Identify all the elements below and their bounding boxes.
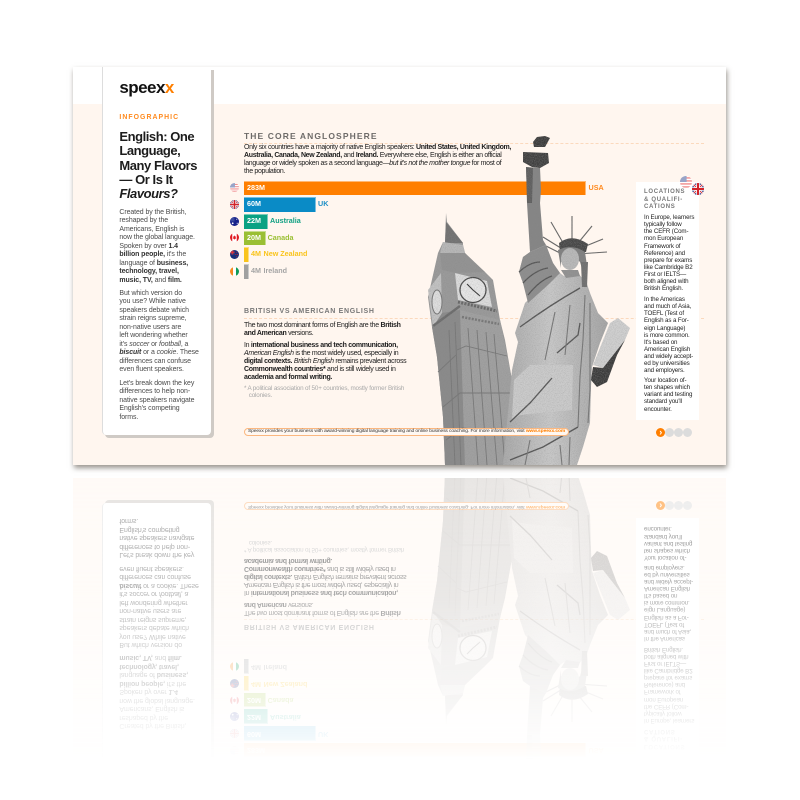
text block: americas: In the Americas xyxy=(644,296,685,303)
title: — Or Is It xyxy=(119,172,173,187)
bar: Canada: 20M xyxy=(247,233,261,242)
mirrored reflection of the infographic: billion people, it's the xyxy=(119,680,186,687)
text block: intro: language of business, xyxy=(119,260,188,266)
text block: which version: you use? While native xyxy=(119,298,186,305)
text block: which version: it's soccer or football, a xyxy=(119,340,188,348)
bar: USA: 283M xyxy=(247,183,265,192)
text block: americas: eign Language) xyxy=(644,325,685,332)
mirrored reflection of the infographic: non-native users are xyxy=(119,608,181,614)
text block: closing xyxy=(119,380,194,420)
heading: the core anglosphere: THE CORE ANGLOSPHERE xyxy=(244,131,378,141)
text block: closing: differences to help non- xyxy=(119,388,190,395)
bar: Canada: Canada xyxy=(268,233,294,242)
mirrored reflection of the infographic: CATIONS xyxy=(644,728,675,734)
mirrored reflection of the infographic: music, TV, and film. xyxy=(119,654,182,662)
text block: europe: Framework of xyxy=(644,243,680,250)
text block: dominant forms: The two most dominant forms of English are the British xyxy=(244,322,401,329)
white header band xyxy=(73,67,726,104)
text block: anglosphere intro: language or widely spoken as a second language—but it's not the mother tongue for most of xyxy=(244,160,501,167)
text block: which version: strain reigns supreme, xyxy=(119,315,186,322)
pagination dots xyxy=(656,427,692,437)
logo: speexx: speexx xyxy=(119,78,174,97)
text block: europe: In Europe, learners xyxy=(644,214,694,221)
mirrored reflection of the infographic: even fluent speakers. xyxy=(119,565,184,572)
text block: dominant forms xyxy=(244,322,401,337)
mirrored reflection of the infographic: reshaped by the xyxy=(119,714,168,721)
text block: which version: But which version do xyxy=(119,290,182,296)
bar: Ireland: 4M xyxy=(251,266,261,275)
text block: closing: English's competing xyxy=(119,405,180,412)
mirrored reflection of the infographic: 4M xyxy=(251,680,261,689)
text block: which version: biscuit or a cookie. These xyxy=(119,349,199,356)
text block: which version: non-native users are xyxy=(119,324,181,330)
title: Many Flavors xyxy=(119,158,197,173)
text block: which version xyxy=(119,290,199,373)
heading: locations & qualifications: & QUALIFI- xyxy=(644,196,683,202)
text block: anglosphere intro xyxy=(244,144,511,175)
text block: americas: is more common. xyxy=(644,332,690,339)
text block: europe: both aligned with xyxy=(644,278,688,285)
mirrored reflection of the infographic xyxy=(73,478,726,746)
text block: americas: It's based on xyxy=(644,339,677,346)
mirrored reflection of the infographic: and widely accept- xyxy=(644,578,693,585)
mirrored reflection of the infographic: Speexx provides your business with award-winning digital language training and online business coaching. For more information, visit www.speexx.com xyxy=(248,504,565,509)
heading: locations & qualifications: LOCATIONS xyxy=(644,189,685,195)
mirrored reflection of the infographic: language of business, xyxy=(119,672,188,678)
text block: closing: Let's break down the key xyxy=(119,380,194,386)
mirrored reflection of the infographic: it's soccer or football, a xyxy=(119,590,188,598)
text block: usage: digital contexts. British English remains prevalent across xyxy=(244,358,406,365)
text block: which version: left wondering whether xyxy=(119,332,188,339)
title: English: One xyxy=(119,129,194,144)
mirrored reflection of the infographic: Ireland xyxy=(264,663,287,672)
bar: Ireland: Ireland xyxy=(264,266,287,275)
mirrored reflection of the infographic: both aligned with xyxy=(644,653,688,660)
bar: Ireland xyxy=(230,264,287,279)
bar: USA xyxy=(230,181,604,195)
mirrored reflection of the infographic: UK xyxy=(318,730,328,739)
text block: your location: encounter. xyxy=(644,406,672,413)
mirrored reflection of the infographic: now the global language. xyxy=(119,697,195,704)
text block: europe: British English. xyxy=(644,285,683,292)
mirrored reflection of the infographic: strain reigns supreme, xyxy=(119,616,186,623)
mirrored reflection of the infographic: 4M xyxy=(251,663,261,672)
mirrored reflection of the infographic: differences to help non- xyxy=(119,543,190,550)
mirrored reflection of the infographic: USA xyxy=(588,746,604,755)
panel: british vs american english xyxy=(244,308,704,399)
text block: which version: differences can confuse xyxy=(119,358,191,364)
mirrored reflection of the infographic: ten shapes which xyxy=(644,547,690,554)
text block: intro: Americans, English is xyxy=(119,226,184,232)
mirrored reflection of the infographic: Australia xyxy=(270,713,301,722)
text block: anglosphere intro: the population. xyxy=(244,168,285,175)
mirrored reflection of the infographic: variant and testing xyxy=(644,540,692,547)
mirrored reflection of the infographic: digital contexts. British English remains prevalent across xyxy=(244,573,406,580)
mirrored reflection of the infographic: you use? While native xyxy=(119,633,186,640)
mirrored reflection of the infographic: Created by the British, xyxy=(119,722,186,730)
text block: your location: Your location of- xyxy=(644,377,686,384)
panel: locations and qualifications xyxy=(636,182,699,420)
mirrored reflection of the infographic: the CEFR (Com- xyxy=(644,703,688,710)
heading: british vs american: BRITISH VS AMERICAN ENGLISH xyxy=(244,308,375,315)
text block: your location xyxy=(644,377,692,413)
text block: intro: now the global language. xyxy=(119,234,195,241)
text block: your location: variant and testing xyxy=(644,391,692,398)
icon: US flag xyxy=(680,176,692,188)
mirrored reflection of the infographic: mon European xyxy=(644,696,683,703)
text block: americas: American English xyxy=(644,346,690,353)
mirrored reflection of the infographic: 60M xyxy=(247,730,261,739)
text block: europe: the CEFR (Com- xyxy=(644,228,688,235)
text block: americas: and employers. xyxy=(644,367,685,374)
mirrored reflection of the infographic: English as a For- xyxy=(644,614,689,621)
text block: americas xyxy=(644,296,693,374)
text block: intro: billion people, it's the xyxy=(119,251,186,258)
text block: intro: Spoken by over 1.4 xyxy=(119,242,178,250)
text block: americas: and widely accept- xyxy=(644,353,693,360)
mirrored reflection of the infographic: native speakers navigate xyxy=(119,534,194,542)
text block: americas: and much of Asia, xyxy=(644,303,691,310)
bar: Australia: 22M xyxy=(247,216,261,225)
illustration: big ben and statue of liberty xyxy=(428,136,630,465)
text block: intro: Created by the British, xyxy=(119,208,186,216)
mirrored reflection of the infographic: technology, travel, xyxy=(119,663,179,670)
title: Language, xyxy=(119,143,180,158)
mirrored reflection of the infographic: Let's break down the key xyxy=(119,552,194,558)
mirrored reflection of the infographic: biscuit or a cookie. These xyxy=(119,582,199,589)
mirrored reflection of the infographic: 283M xyxy=(247,746,265,755)
text block: which version: even fluent speakers. xyxy=(119,366,184,373)
text block: americas: ed by universities xyxy=(644,360,690,367)
mirrored reflection of the infographic: is more common. xyxy=(644,599,690,606)
label: infographic: INFOGRAPHIC xyxy=(119,114,179,121)
heading: locations & qualifications xyxy=(644,188,685,210)
mirrored reflection of the infographic: colonies. xyxy=(249,539,272,546)
mirrored reflection of the infographic: › xyxy=(659,501,662,511)
mirrored reflection of the infographic: American English is the most widely used, especially in xyxy=(244,581,398,588)
panel: sidebar intro xyxy=(102,67,210,435)
text block: americas: TOEFL (Test of xyxy=(644,310,684,317)
text block: europe: like Cambridge B2 xyxy=(644,264,693,271)
mirrored reflection of the infographic: Canada xyxy=(268,696,294,705)
pagination dots: › xyxy=(659,427,662,437)
mirrored reflection of the infographic: Your location of- xyxy=(644,554,686,561)
mirrored reflection of the infographic: speakers debate which xyxy=(119,624,189,632)
mirrored reflection of the infographic: 20M xyxy=(247,696,261,705)
mirrored reflection of the infographic: differences can confuse xyxy=(119,574,191,580)
bar: New Zealand: 4M xyxy=(251,249,261,258)
mirrored reflection of the infographic: First or IELTS— xyxy=(644,660,686,667)
text block: americas: English as a For- xyxy=(644,317,689,324)
mirrored reflection of the infographic: Spoken by over 1.4 xyxy=(119,688,178,696)
mirrored reflection of the infographic: left wondering whether xyxy=(119,599,188,606)
mirrored reflection of the infographic: academia and formal writing. xyxy=(244,557,332,564)
mirrored reflection of the infographic: But which version do xyxy=(119,642,182,648)
title: Flavours? xyxy=(119,186,177,201)
bar: Canada xyxy=(230,231,294,245)
text block: europe: mon European xyxy=(644,235,683,242)
bar: New Zealand: New Zealand xyxy=(264,249,307,258)
icon: UK flag xyxy=(692,183,704,195)
mirrored reflection of the infographic: It's based on xyxy=(644,592,677,599)
mirrored reflection of the infographic: & QUALIFI- xyxy=(644,736,683,742)
mirrored reflection of the infographic: and employers. xyxy=(644,564,685,571)
text block: intro xyxy=(119,208,195,284)
heading: locations & qualifications: CATIONS xyxy=(644,204,675,210)
callout: speexx footer pill: Speexx provides your business with award-winning digital language training and online business coaching. For more information, visit www.speexx.com xyxy=(248,429,565,434)
bar: UK xyxy=(230,197,328,212)
mirrored reflection of the infographic: In international business and tech communication, xyxy=(244,589,398,596)
footnote xyxy=(244,385,404,399)
text block: your location: standard you'll xyxy=(644,398,682,405)
text block: europe xyxy=(644,214,694,292)
mirrored reflection of the infographic: American English xyxy=(644,585,690,592)
text block: intro: music, TV, and film. xyxy=(119,276,182,284)
text block: usage: In international business and tech communication, xyxy=(244,342,398,349)
footnote: colonies. xyxy=(249,392,272,399)
footnote: * A political association of 50+ countries, mostly former British xyxy=(244,385,404,392)
mirrored reflection of the infographic: forms. xyxy=(119,518,138,524)
mirrored reflection of the infographic: British English. xyxy=(644,646,683,653)
text block: closing: native speakers navigate xyxy=(119,396,194,404)
text block: intro: reshaped by the xyxy=(119,217,168,224)
mirrored reflection of the infographic: * A political association of 50+ countries, mostly former British xyxy=(244,546,404,553)
text block: closing: forms. xyxy=(119,414,138,420)
panel: the core anglosphere xyxy=(230,131,704,279)
mirrored reflection of the infographic: In Europe, learners xyxy=(644,717,694,724)
bar: USA: USA xyxy=(588,183,604,192)
mirrored reflection of the infographic: encounter. xyxy=(644,525,672,532)
text block: europe: Reference) and xyxy=(644,250,685,257)
text block: usage: Commonwealth countries* and is still widely used in xyxy=(244,366,396,373)
text block: anglosphere intro: Only six countries have a majority of native English speakers: United States, United Kingdom, xyxy=(244,144,511,151)
text block: europe: typically follow xyxy=(644,221,682,228)
text block: europe: prepare for exams xyxy=(644,257,692,264)
mirrored reflection of the infographic: In the Americas xyxy=(644,635,685,642)
mirrored reflection of the infographic: prepare for exams xyxy=(644,674,692,681)
bar chart: native speakers xyxy=(230,181,604,279)
mirrored reflection of the infographic: Framework of xyxy=(644,688,680,695)
bar: UK: UK xyxy=(318,199,328,208)
mirrored reflection of the infographic: like Cambridge B2 xyxy=(644,667,693,674)
infographic card xyxy=(73,67,726,465)
mirrored reflection of the infographic: and much of Asia, xyxy=(644,628,691,635)
mirrored reflection of the infographic: TOEFL (Test of xyxy=(644,621,684,628)
text block: dominant forms: and American versions. xyxy=(244,330,313,337)
text block: europe: First or IELTS— xyxy=(644,271,686,278)
text block: usage xyxy=(244,342,406,381)
mirrored reflection of the infographic: The two most dominant forms of English are the British xyxy=(244,609,401,616)
bar: Australia xyxy=(230,214,301,229)
mirrored reflection of the infographic: eign Language) xyxy=(644,606,685,613)
mirrored reflection of the infographic: Commonwealth countries* and is still widely used in xyxy=(244,565,396,572)
text block: which version: speakers debate which xyxy=(119,306,189,314)
mirrored reflection of the infographic: 22M xyxy=(247,713,261,722)
mirrored reflection of the infographic: BRITISH VS AMERICAN ENGLISH xyxy=(244,623,375,630)
mirrored reflection of the infographic: New Zealand xyxy=(264,680,307,689)
callout: speexx footer pill xyxy=(244,428,568,436)
title xyxy=(119,129,197,201)
bar: UK: 60M xyxy=(247,199,261,208)
text block: intro: technology, travel, xyxy=(119,268,179,275)
mirrored reflection of the infographic: typically follow xyxy=(644,710,682,717)
text block: usage: academia and formal writing. xyxy=(244,374,332,381)
text block: usage: American English is the most widely used, especially in xyxy=(244,350,398,357)
mirrored reflection of the infographic: Reference) and xyxy=(644,681,685,688)
mirrored reflection of the infographic: standard you'll xyxy=(644,533,682,540)
text block: your location: ten shapes which xyxy=(644,384,690,391)
mirrored reflection of the infographic: ed by universities xyxy=(644,571,690,578)
text block: anglosphere intro: Australia, Canada, New Zealand, and Ireland. Everywhere else, English is either an official xyxy=(244,152,502,159)
bar: Australia: Australia xyxy=(270,216,301,225)
bar: New Zealand xyxy=(230,247,307,262)
mirrored reflection of the infographic: English's competing xyxy=(119,526,180,533)
mirrored reflection of the infographic: and American versions. xyxy=(244,601,313,608)
mirrored reflection of the infographic: LOCATIONS xyxy=(644,743,685,749)
mirrored reflection of the infographic: Americans, English is xyxy=(119,706,184,712)
